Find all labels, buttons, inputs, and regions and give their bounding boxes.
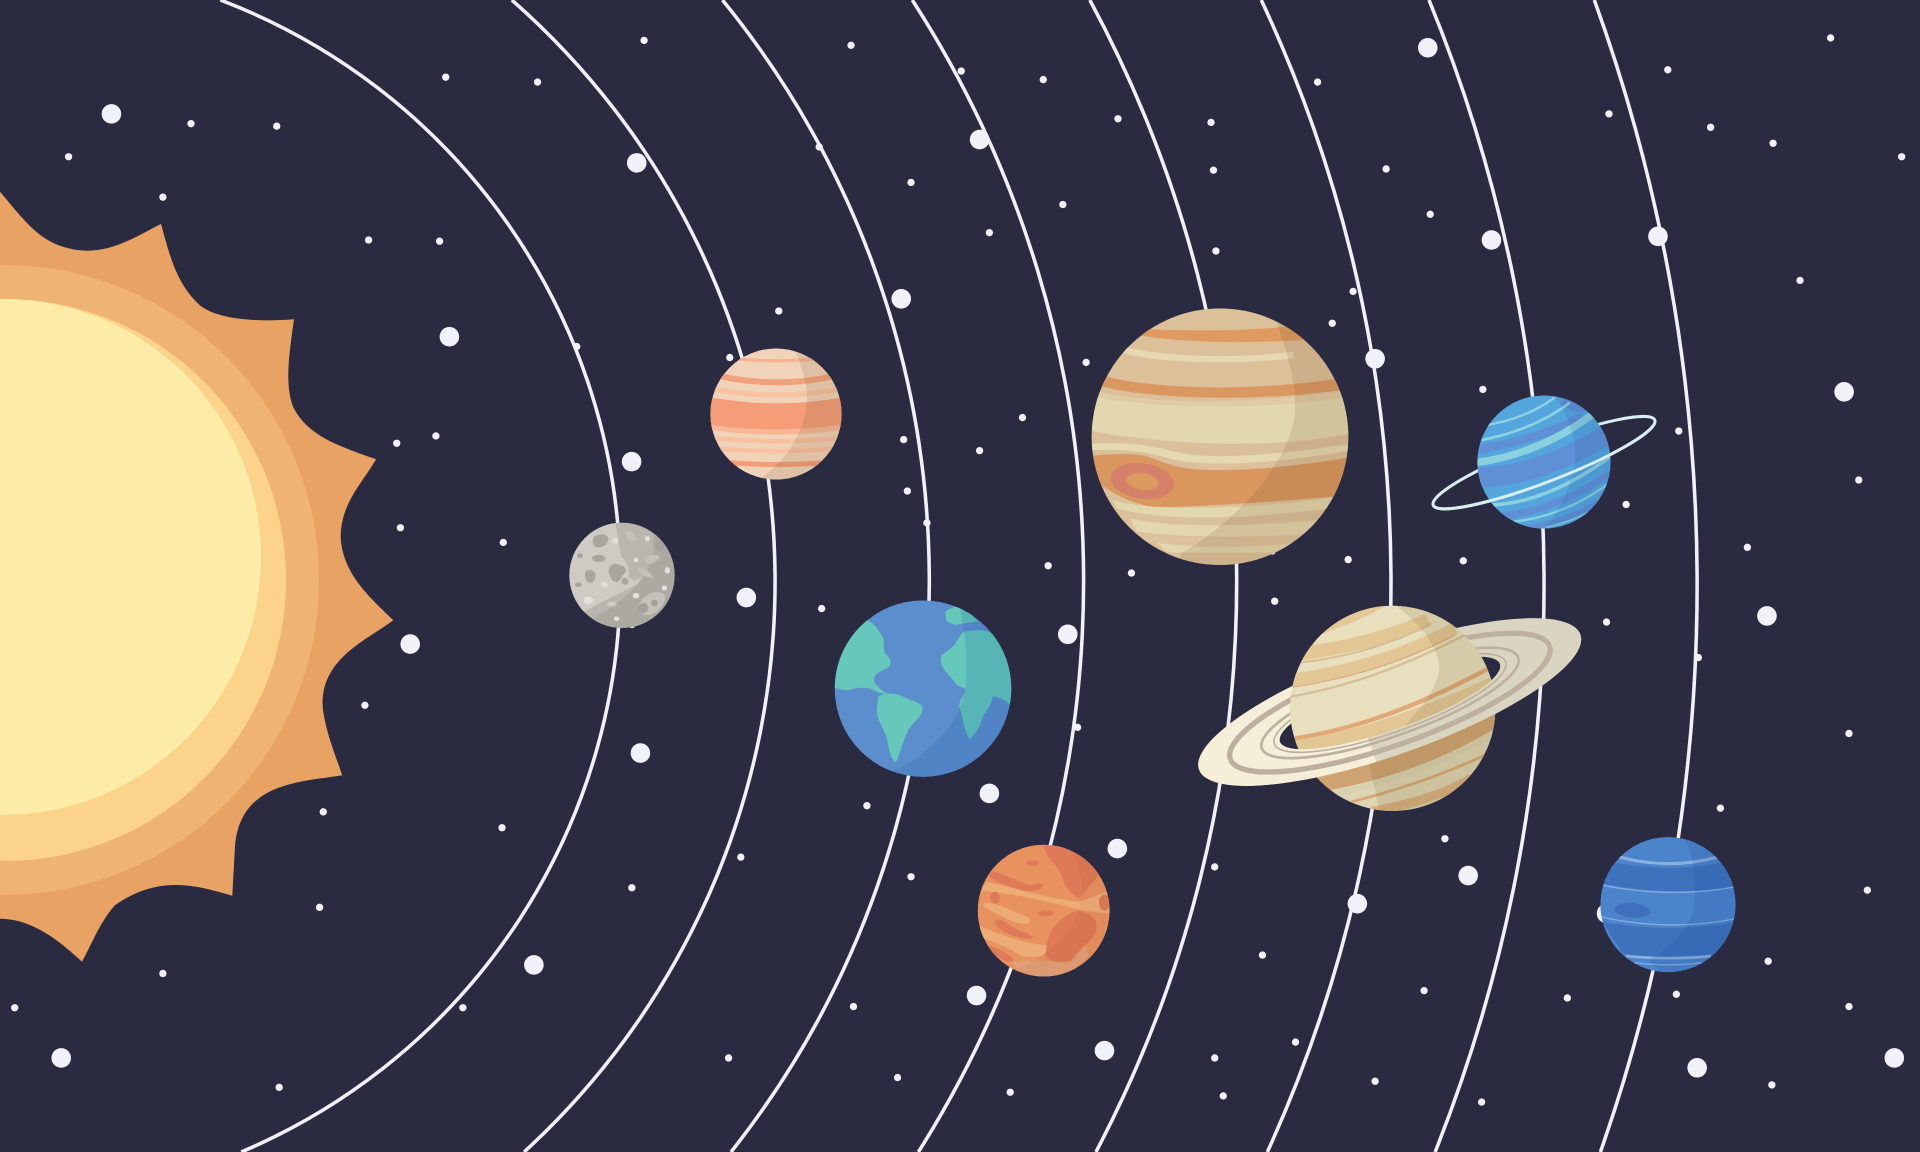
Saturn front ring: [1200, 636, 1582, 786]
Uranus body: [1477, 396, 1611, 529]
sun: [0, 192, 393, 962]
planet: Earth: [834, 600, 1012, 777]
planet: Mars: [978, 845, 1115, 982]
sun corona: [0, 192, 393, 962]
sun core: [0, 299, 261, 815]
sun middle ring: [0, 299, 286, 861]
planet: Jupiter: [1087, 307, 1360, 573]
planet: Neptune: [1600, 837, 1739, 975]
planet: Mercury: [569, 522, 675, 628]
planet: Saturn: [1198, 606, 1582, 811]
planet: Uranus: [1426, 393, 1662, 530]
sun outer ring: [0, 265, 319, 895]
Saturn rear ring: [1181, 585, 1598, 819]
Saturn body: [1290, 606, 1496, 811]
orbit lines: [220, 0, 1697, 1152]
Uranus rear ring: [1426, 402, 1662, 523]
planet: Venus: [710, 348, 842, 480]
Uranus front ring: [1432, 420, 1656, 510]
